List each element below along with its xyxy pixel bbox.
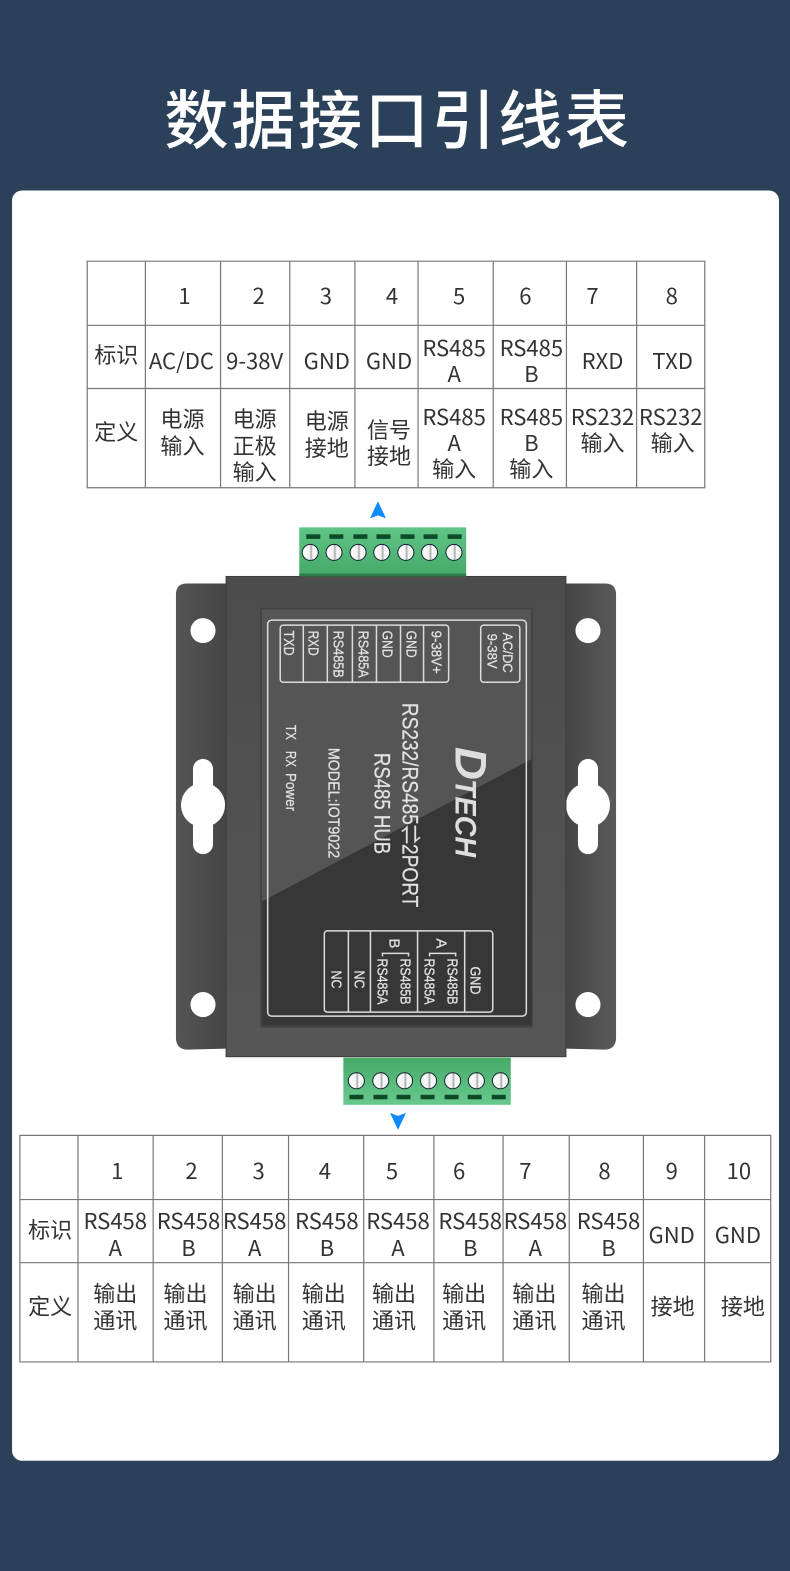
table: input pin definitions: 6	[519, 279, 531, 311]
power legend: AC/DC	[500, 633, 516, 673]
table: input pin definitions	[87, 261, 705, 488]
table: output pin definitions: A	[109, 1231, 123, 1263]
table: input pin definitions: 电源	[160, 402, 205, 434]
table: output pin definitions: 标识	[28, 1213, 72, 1245]
power legend	[481, 625, 520, 682]
table: output pin definitions: 输出	[512, 1276, 556, 1308]
table: input pin definitions: RS232	[639, 400, 702, 432]
table: input pin definitions: A	[447, 426, 461, 458]
table: input pin definitions: RS485	[500, 400, 563, 432]
table: output pin definitions: 10	[727, 1154, 751, 1186]
table: output pin definitions: B	[601, 1231, 616, 1263]
table: input pin definitions: RS485	[422, 331, 486, 363]
top terminal legend	[280, 625, 449, 682]
table: output pin definitions: RS458	[223, 1204, 286, 1236]
table: output pin definitions: A	[248, 1231, 262, 1263]
table: output pin definitions: 7	[519, 1154, 531, 1186]
table: output pin definitions: A	[391, 1231, 405, 1263]
table: output pin definitions: 1	[111, 1154, 123, 1186]
logo: DTECH: TECH	[449, 779, 482, 858]
table: output pin definitions: 通讯	[372, 1303, 416, 1335]
table: output pin definitions: 通讯	[302, 1303, 346, 1335]
table: output pin definitions: GND	[649, 1218, 695, 1250]
panel: white card	[12, 190, 779, 1461]
logo: DTECH: D	[446, 747, 495, 780]
top terminal block	[299, 527, 466, 576]
top terminal legend: RS485A	[354, 631, 371, 678]
table: output pin definitions: B	[463, 1231, 477, 1263]
table: output pin definitions: 通讯	[163, 1303, 208, 1335]
product name: Power	[282, 773, 299, 811]
table: output pin definitions: A	[529, 1231, 543, 1263]
bottom terminal legend: NC	[350, 970, 367, 989]
table: output pin definitions: 通讯	[512, 1303, 556, 1335]
product name: TX	[282, 725, 299, 740]
table: output pin definitions: 6	[453, 1154, 465, 1186]
table: input pin definitions: GND	[366, 344, 412, 376]
table: input pin definitions: RS485	[500, 331, 563, 363]
table: input pin definitions: 定义	[94, 415, 138, 447]
table: output pin definitions: 通讯	[93, 1303, 137, 1335]
top terminal legend: RS485B	[329, 631, 346, 678]
table: output pin definitions	[20, 1135, 771, 1362]
mounting holes	[181, 618, 610, 1017]
right flange	[566, 583, 616, 1050]
table: output pin definitions: 输出	[233, 1276, 277, 1308]
table: output pin definitions: 输出	[581, 1276, 626, 1308]
table: output pin definitions: RS458	[577, 1204, 640, 1236]
product name: RS232/RS485⇌2PORT	[398, 703, 423, 907]
table: input pin definitions: 输入	[580, 426, 625, 458]
table: input pin definitions: A	[447, 357, 461, 389]
table: input pin definitions: 接地	[367, 439, 411, 471]
label panel	[261, 609, 532, 1027]
table: input pin definitions: 正极	[233, 429, 277, 461]
table: output pin definitions: RS458	[157, 1204, 220, 1236]
table: output pin definitions: 通讯	[233, 1303, 277, 1335]
table: input pin definitions: 5	[453, 279, 465, 311]
table: output pin definitions: 4	[319, 1154, 331, 1186]
arrow: down	[390, 1113, 406, 1130]
bottom terminal legend: B	[385, 938, 402, 948]
table: input pin definitions: 电源	[233, 402, 277, 434]
table: input pin definitions: 信号	[367, 413, 411, 445]
table: output pin definitions: 输出	[93, 1276, 137, 1308]
table: output pin definitions: 输出	[372, 1276, 416, 1308]
table: output pin definitions: 通讯	[581, 1303, 626, 1335]
arrow: up	[370, 501, 386, 518]
title: 数据接口引线表	[164, 70, 632, 162]
table: input pin definitions: B	[524, 357, 539, 389]
table: output pin definitions: 8	[598, 1154, 611, 1186]
table: input pin definitions: 接地	[305, 431, 349, 463]
table: output pin definitions: 通讯	[442, 1303, 486, 1335]
table: input pin definitions: 标识	[94, 338, 138, 370]
table: output pin definitions: 2	[185, 1154, 198, 1186]
table: input pin definitions: RS232	[571, 400, 634, 432]
product name: RX	[282, 751, 299, 767]
table: output pin definitions: 输出	[163, 1276, 208, 1308]
table: output pin definitions: B	[181, 1231, 196, 1263]
table: input pin definitions: 输入	[651, 426, 695, 458]
power legend: 9-38V	[485, 634, 501, 669]
table: output pin definitions: 3	[253, 1154, 265, 1186]
bottom terminal legend	[324, 931, 493, 1012]
bottom terminal legend: RS485A	[373, 958, 390, 1005]
table: output pin definitions: 接地	[721, 1289, 765, 1321]
table: input pin definitions: 8	[666, 279, 678, 311]
table: output pin definitions: RS458	[438, 1204, 502, 1236]
product name	[282, 703, 423, 907]
bottom terminal legend: NC	[327, 970, 344, 989]
bottom terminal legend: RS485A	[421, 958, 438, 1005]
table: output pin definitions: 输出	[302, 1276, 346, 1308]
top terminal legend: TXD	[280, 631, 297, 656]
table: output pin definitions: 输出	[442, 1276, 486, 1308]
table: output pin definitions: RS458	[366, 1204, 430, 1236]
bottom terminal legend: RS485B	[397, 958, 414, 1005]
table: input pin definitions: AC/DC	[149, 344, 214, 376]
table: output pin definitions: RS458	[504, 1204, 567, 1236]
bottom terminal legend: A	[433, 938, 450, 948]
bottom terminal block	[343, 1058, 511, 1105]
table: input pin definitions: TXD	[652, 344, 693, 376]
label border	[268, 620, 526, 1016]
table: input pin definitions: 9-38V	[226, 344, 283, 376]
top terminal legend: RXD	[304, 631, 321, 656]
table: input pin definitions: B	[524, 426, 539, 458]
table: output pin definitions: RS458	[295, 1204, 359, 1236]
left flange	[176, 583, 226, 1050]
table: input pin definitions: GND	[304, 344, 350, 376]
table: input pin definitions: 输入	[432, 452, 476, 484]
table: input pin definitions: RS485	[422, 400, 486, 432]
table: output pin definitions: 9	[666, 1154, 678, 1186]
bottom terminal legend: GND	[467, 966, 484, 995]
table: input pin definitions: 4	[386, 279, 398, 311]
device: RS485 hub	[176, 527, 616, 1105]
table: input pin definitions: 1	[178, 279, 191, 311]
table: input pin definitions: 输入	[509, 452, 553, 484]
table: output pin definitions: B	[320, 1231, 334, 1263]
table: input pin definitions: 电源	[305, 404, 349, 436]
body	[226, 576, 566, 1057]
table: input pin definitions: 3	[320, 279, 332, 311]
table: output pin definitions: GND	[715, 1218, 761, 1250]
table: input pin definitions: 输入	[160, 429, 205, 461]
table: input pin definitions: 7	[586, 279, 599, 311]
top terminal legend: GND	[403, 631, 420, 658]
table: output pin definitions: 5	[386, 1154, 398, 1186]
label dark diagonal	[262, 759, 532, 1026]
table: input pin definitions: 输入	[233, 455, 277, 487]
table: input pin definitions: 2	[253, 279, 265, 311]
product name: RS485 HUB	[369, 753, 394, 854]
logo: DTECH	[446, 747, 495, 858]
table: output pin definitions: 接地	[651, 1289, 695, 1321]
table: input pin definitions: RXD	[582, 344, 623, 376]
top terminal legend: GND	[378, 631, 395, 658]
table: output pin definitions: RS458	[84, 1204, 147, 1236]
bottom terminal legend: RS485B	[444, 958, 461, 1005]
table: output pin definitions: 定义	[28, 1289, 72, 1321]
top terminal legend: 9-38V+	[428, 631, 445, 674]
product name: MODEL:IOT9022	[324, 748, 342, 858]
